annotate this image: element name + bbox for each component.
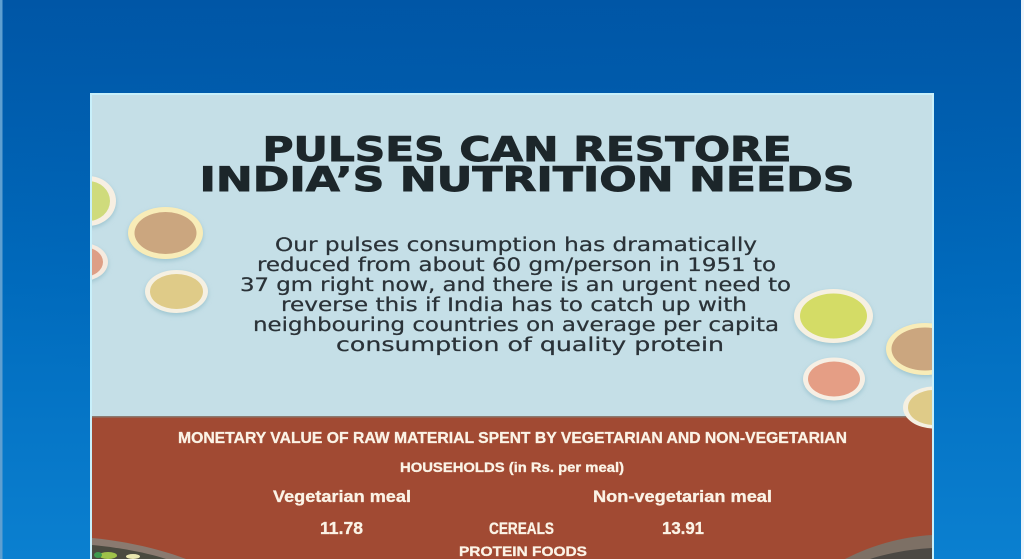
column: non-vegetarian meal: Non-vegetarian meal <box>593 488 772 506</box>
intro text: reverse this if India has to catch up with <box>281 295 747 316</box>
title: PULSES CAN RESTORE <box>262 130 792 170</box>
title <box>200 130 854 200</box>
panel: pale blue header <box>92 95 932 417</box>
intro text: 37 gm right now, and there is an urgent need to <box>240 275 791 296</box>
row label: protein foods: PROTEIN FOODS <box>459 543 587 559</box>
title: INDIA’S NUTRITION NEEDS <box>200 160 854 200</box>
bowl: yellow right <box>903 386 932 428</box>
pulse bowls <box>58 176 965 428</box>
table subheading: HOUSEHOLDS (in Rs. per meal) <box>400 459 624 475</box>
column: vegetarian meal: Vegetarian meal <box>273 488 411 506</box>
intro text: consumption of quality protein <box>336 335 724 356</box>
bowl: green right <box>794 289 873 345</box>
bowl: salmon left <box>92 244 110 284</box>
bowl: green left <box>92 176 118 230</box>
value: non-vegetarian cereals: 13.91 <box>662 518 704 538</box>
table heading: MONETARY VALUE OF RAW MATERIAL SPENT BY VEGETARIAN AND NON-VEGETARIAN <box>178 430 847 447</box>
table text <box>178 430 847 559</box>
bowl: yellow left <box>145 270 208 315</box>
panel: brown table <box>92 416 932 559</box>
bowl: brown right <box>884 323 932 379</box>
value: vegetarian cereals: 11.78 <box>320 518 363 538</box>
dish: bottom right <box>845 535 932 559</box>
intro text: Our pulses consumption has dramatically <box>275 235 757 256</box>
bowl: brown left <box>128 207 203 261</box>
intro text <box>240 235 791 356</box>
intro text: neighbouring countries on average per capita <box>253 315 779 336</box>
row label: cereals: CEREALS <box>489 520 554 538</box>
card border <box>90 93 934 559</box>
dish: bottom left <box>92 538 186 559</box>
bowl: salmon right <box>803 358 865 402</box>
intro text: reduced from about 60 gm/person in 1951 to <box>257 255 776 276</box>
